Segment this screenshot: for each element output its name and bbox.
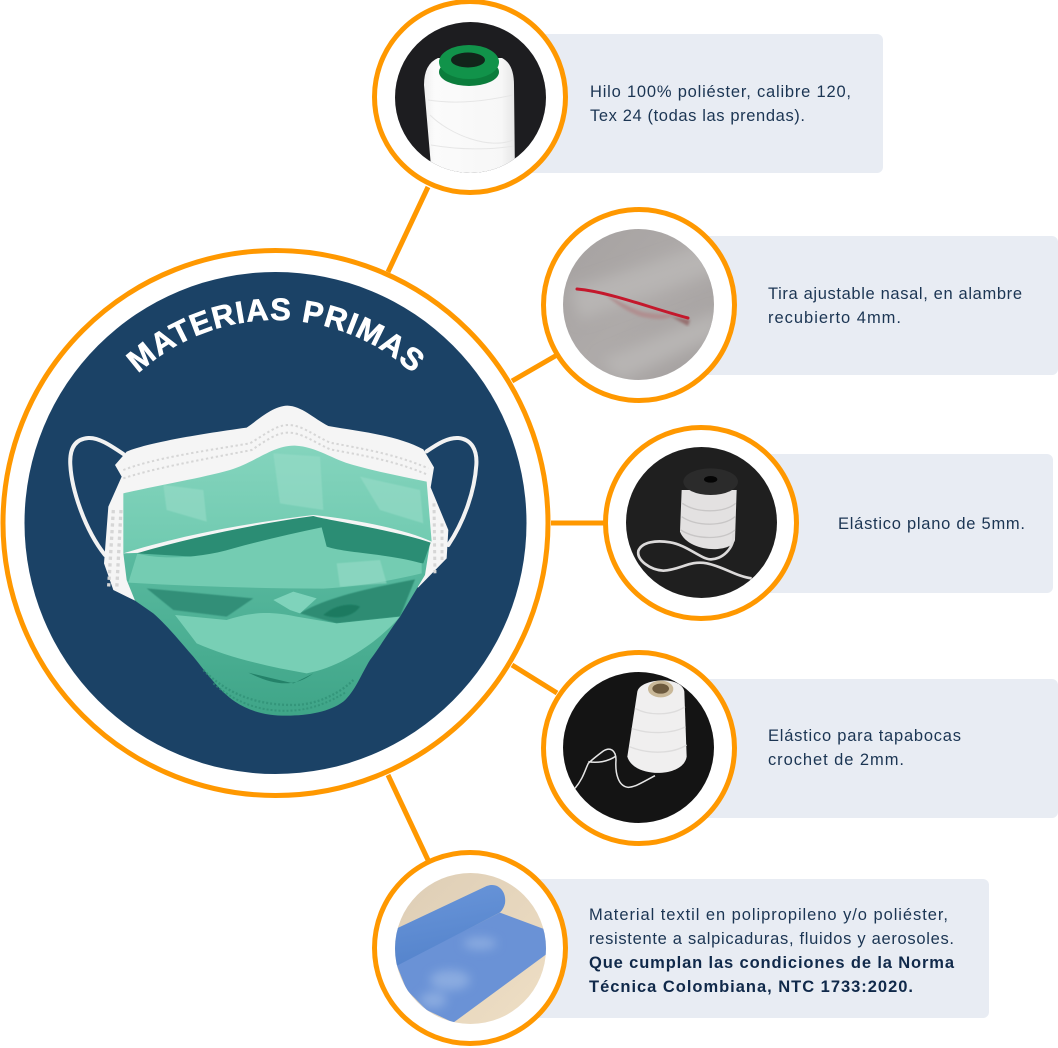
item: thread	[374, 2, 883, 192]
lower shadow folds	[147, 588, 253, 617]
ring	[374, 2, 566, 192]
ring	[374, 852, 566, 1044]
lower front pleat	[175, 613, 400, 673]
panel background	[520, 34, 883, 173]
lower mask body	[123, 543, 430, 716]
description: Tira ajustable nasal, en alambre	[768, 285, 1022, 303]
panel background	[690, 679, 1058, 818]
photo: crochet elastic cone	[563, 672, 714, 823]
photo: nasal wire	[563, 229, 714, 380]
description: Tex 24 (todas las prendas).	[590, 107, 805, 125]
ear loops	[70, 438, 476, 555]
connector lines	[388, 187, 605, 860]
panel background	[690, 236, 1058, 375]
bold note: Que cumplan las condiciones de la Norma	[589, 954, 955, 972]
ring	[544, 210, 734, 400]
middle pleat	[128, 527, 422, 589]
ring	[544, 652, 734, 844]
band perforations	[109, 425, 442, 590]
photo: thread spool	[395, 22, 546, 173]
outer orange ring	[3, 250, 548, 796]
panel background	[520, 879, 989, 1018]
central circle: materias primas	[0, 248, 550, 798]
ring	[606, 428, 796, 618]
middle highlight	[337, 560, 387, 587]
white band	[104, 406, 448, 601]
description: Material textil en polipropileno y/o poliéster,	[589, 906, 948, 924]
title: MATERIAS PRIMAS	[126, 298, 424, 372]
description: recubierto 4mm.	[768, 309, 901, 327]
panel background	[750, 454, 1053, 593]
description: Hilo 100% poliéster, calibre 120,	[590, 83, 851, 101]
surgical mask illustration	[70, 406, 476, 716]
description: Elástico para tapabocas	[768, 727, 961, 745]
description: resistente a salpicaduras, fluidos y aerosoles.	[589, 930, 954, 948]
chin shadow	[248, 673, 313, 683]
upper pleat	[123, 446, 432, 553]
description: Elástico plano de 5mm.	[838, 515, 1025, 533]
dark fold shadows	[137, 516, 431, 563]
navy disc	[24, 272, 526, 774]
item: textile	[374, 852, 989, 1044]
item: crochet elastic	[544, 652, 1058, 844]
item: nasal strip	[544, 210, 1058, 400]
photo: flat elastic spool	[626, 447, 777, 598]
nose fold	[273, 592, 317, 613]
pleat highlights	[163, 453, 423, 523]
bottom pleat texture	[203, 670, 353, 711]
bold note: Técnica Colombiana, NTC 1733:2020.	[589, 978, 913, 996]
item: flat elastic	[606, 428, 1053, 618]
photo: blue textile roll	[395, 873, 546, 1024]
description: crochet de 2mm.	[768, 751, 904, 769]
